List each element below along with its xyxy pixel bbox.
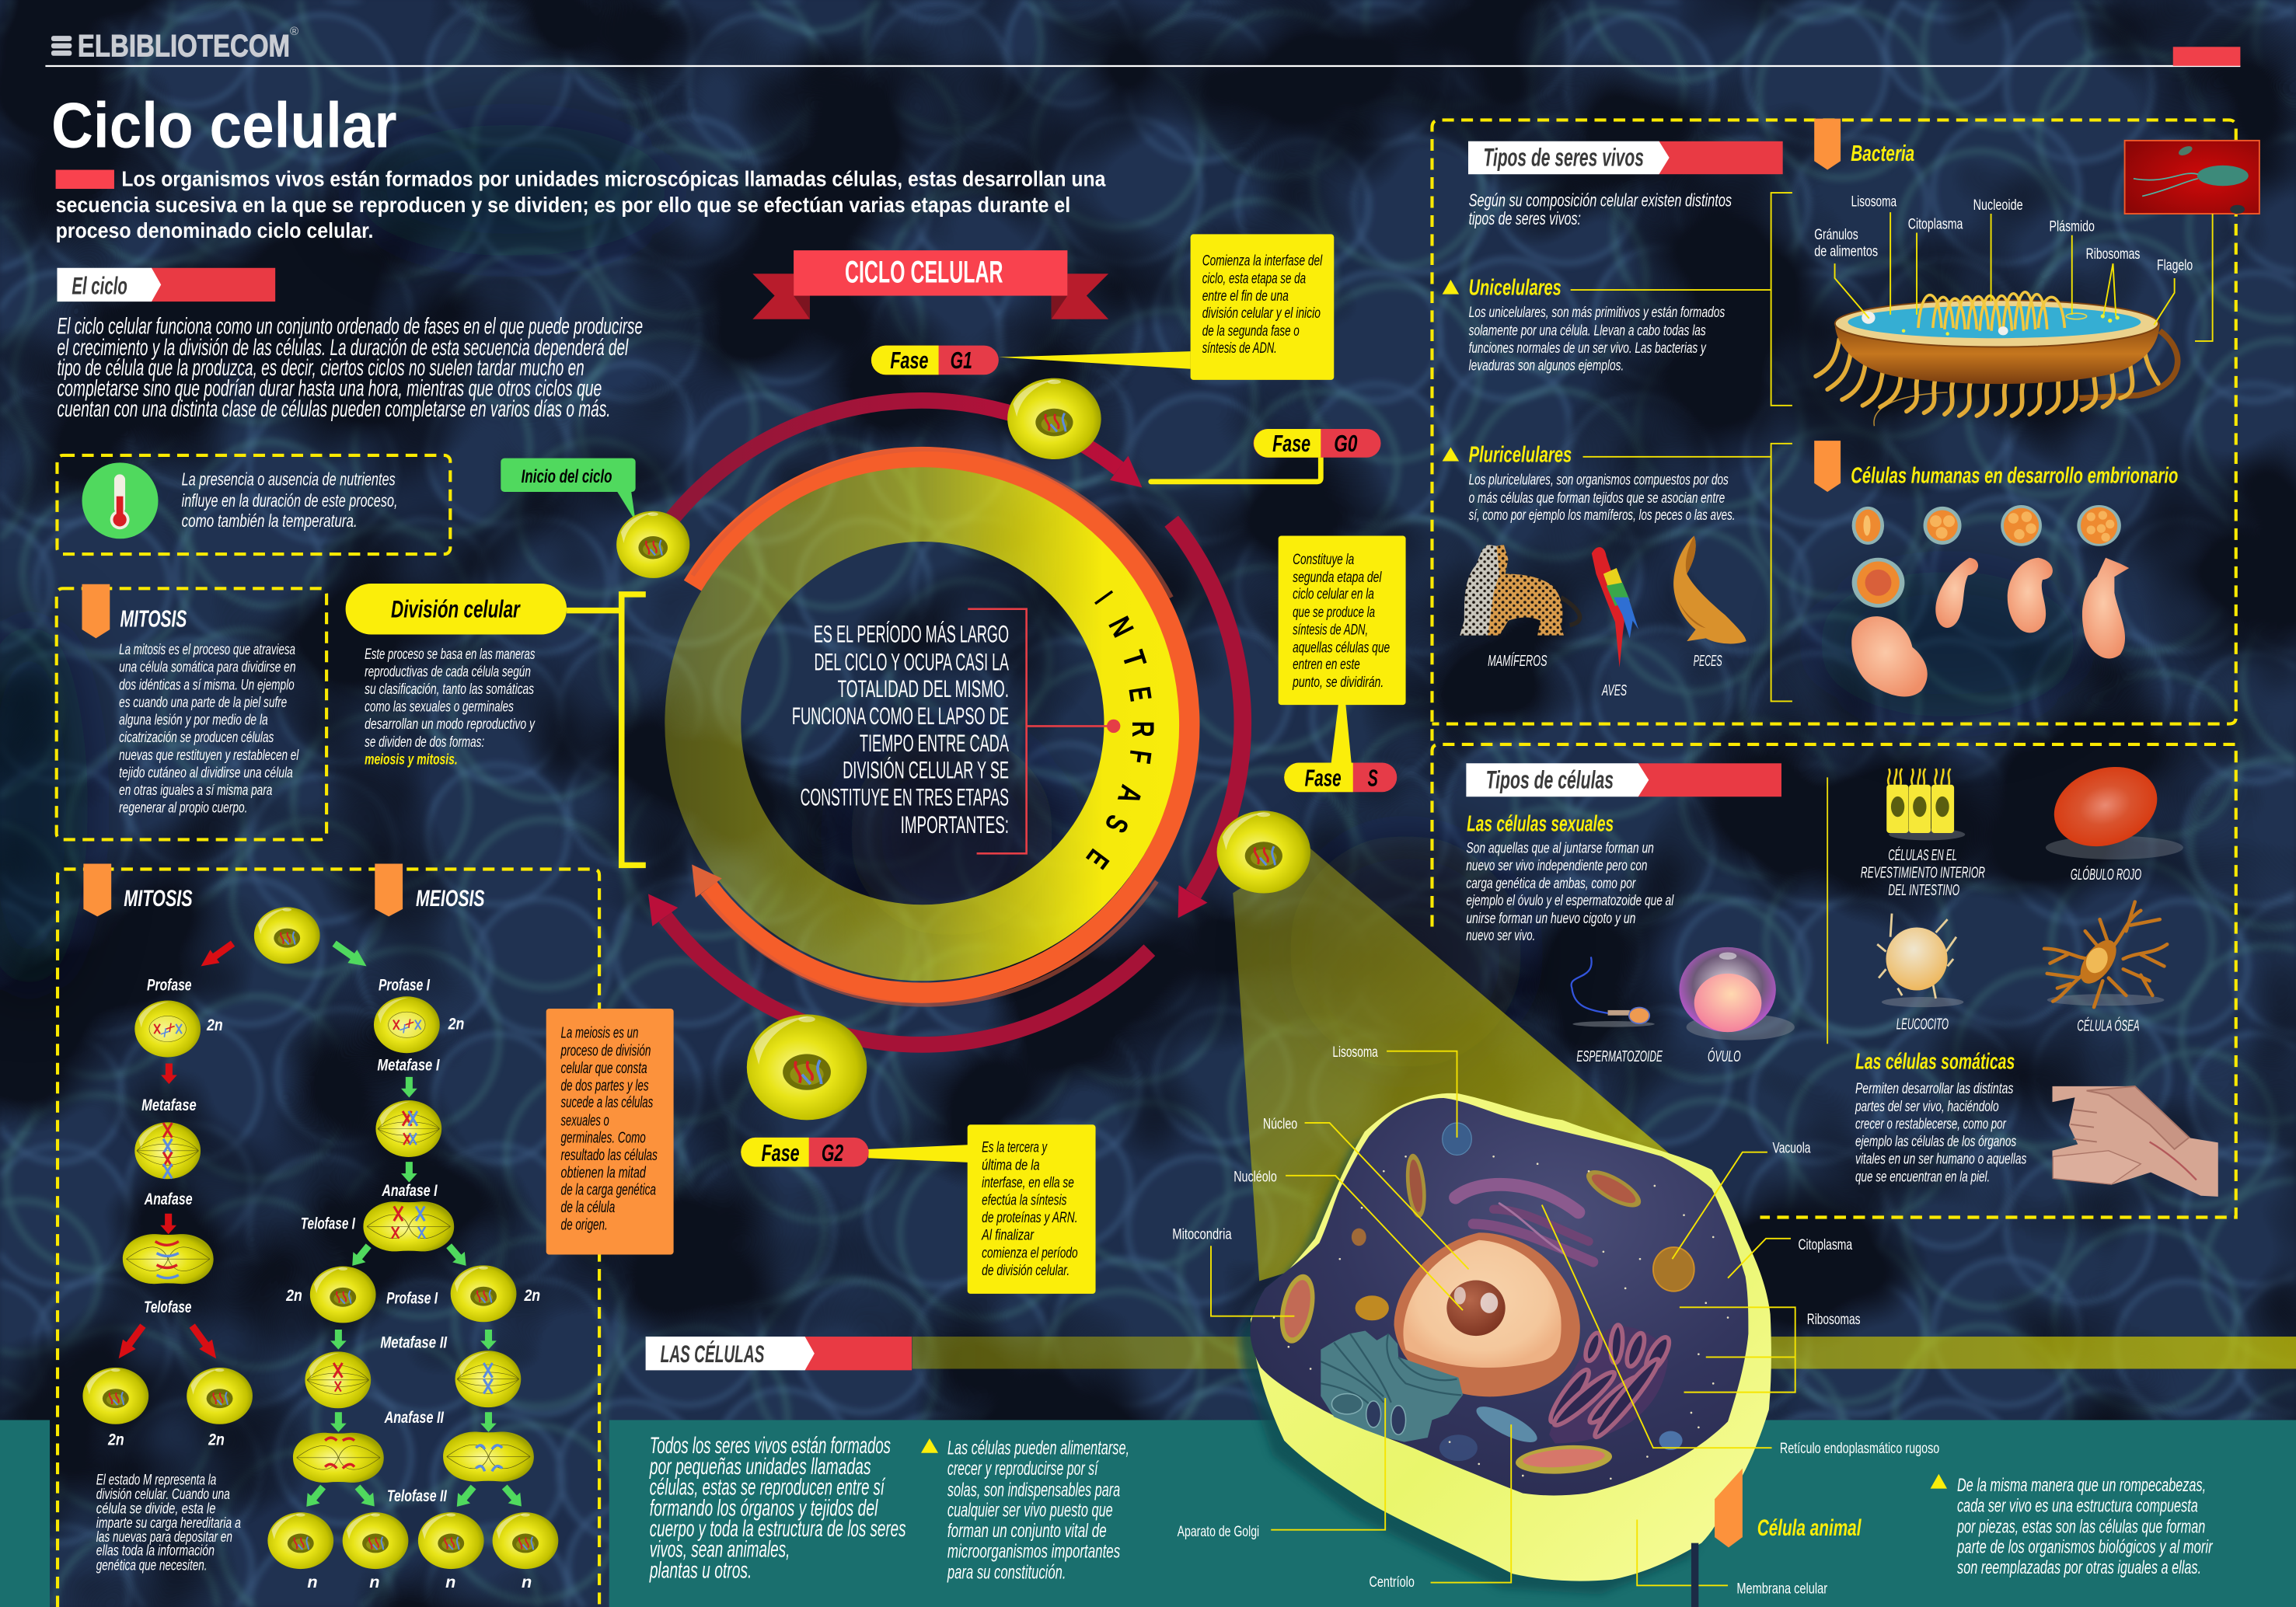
callout G2: Al finalizar <box>981 1227 1035 1244</box>
panel: tipos de seres vivos: Bacteria <box>1851 141 1914 166</box>
stage labels: Telofase II <box>387 1486 448 1505</box>
icon: leukocyte <box>1877 914 1963 1007</box>
sex cell labels: ESPERMATOZOIDE <box>1576 1048 1663 1065</box>
panel: temperature: influye en la duración de este proceso, <box>182 490 397 511</box>
cell: inicio <box>616 511 689 578</box>
callout: meiosis: sexuales o <box>561 1112 609 1130</box>
interphase center text: TOTALIDAD DEL MISMO. <box>838 675 1009 702</box>
header rule <box>45 65 2240 67</box>
text: las celulas pueden alimentarse: Las células pueden alimentarse, <box>947 1438 1129 1459</box>
stage labels: 2n <box>448 1013 464 1033</box>
mitosis cells <box>82 1001 253 1424</box>
heading tab: tipos de celulas <box>1466 763 1781 797</box>
text: estado M: ellas toda la información <box>96 1543 215 1560</box>
panel: mitosis and meiosis diagram <box>58 864 599 1607</box>
callout S: segunda etapa del <box>1293 569 1382 586</box>
heading tab: El ciclo <box>57 268 275 302</box>
callout: meiosis: de dos partes y les <box>561 1077 649 1095</box>
stage labels: Telofase <box>144 1297 191 1316</box>
block: sexual cells: Son aquellas que al juntarse forman un <box>1466 840 1654 857</box>
panel: mitosis definition: regenerar al propio cuerpo. <box>119 800 247 817</box>
cell labels: DEL INTESTINO <box>1888 881 1959 899</box>
block: somatic cells: que se encuentran en la piel. <box>1855 1168 1990 1185</box>
callout: meiosis: de origen. <box>561 1216 608 1234</box>
yellow band behind cell <box>912 1337 2296 1368</box>
ring label: INTERFASE: N <box>1101 612 1140 643</box>
photo: bacterium <box>2125 141 2259 214</box>
logo: ® <box>290 25 298 38</box>
bacterium labels: Plásmido <box>2050 218 2095 235</box>
ring label: INTERFASE: F <box>1122 748 1157 765</box>
phase G2 label <box>741 1138 968 1166</box>
unicelulares: funciones normales de un ser vivo. Las bacterias y <box>1469 340 1707 357</box>
icon: red blood cell <box>2043 755 2183 859</box>
block: sexual cells <box>1466 811 1674 944</box>
stage labels: Telofase I <box>301 1213 356 1232</box>
text: todos los seres vivos: plantas u otros. <box>649 1559 752 1584</box>
unicelulares: levaduras son algunos ejemplos. <box>1469 357 1624 375</box>
stage labels: n <box>307 1572 318 1591</box>
text: division celular: meiosis y mitosis. <box>365 751 458 768</box>
bacterium labels: Nucleoide <box>1973 197 2023 214</box>
interphase center text: FUNCIONA COMO EL LAPSO DE <box>792 702 1009 730</box>
phase G1 label <box>871 346 1191 375</box>
text: las celulas pueden alimentarse: microorganismos importantes <box>947 1541 1120 1563</box>
text: division celular: desarrollan un modo reproductivo y <box>365 716 536 733</box>
bacterium labels: Ribosomas <box>2086 246 2140 263</box>
panel: mitosis definition: dos idénticas a sí misma. Un ejemplo <box>119 676 295 693</box>
callout: meiosis: celular que consta <box>561 1059 647 1077</box>
orange tab meiosis <box>375 864 403 916</box>
ring label: INTERFASE: I <box>1088 586 1118 610</box>
labels: animal cell <box>1172 1044 1939 1598</box>
callout: meiosis: resultado las células <box>561 1146 658 1164</box>
tab: bacteria <box>1814 119 1841 170</box>
cell labels: LEUCOCITO <box>1896 1015 1949 1033</box>
brackets <box>1571 193 1792 701</box>
callout G2: de proteínas y ARN. <box>982 1209 1078 1226</box>
bracket: division <box>567 594 646 865</box>
panel: tipos de seres vivos <box>1432 119 2259 741</box>
ring label: INTERFASE: E <box>1122 685 1158 703</box>
callout S: aquellas células que <box>1293 639 1390 656</box>
unicelulares: Unicelulares <box>1469 274 1561 299</box>
callout G1: de la segunda fase o <box>1202 322 1300 340</box>
bracket: bacterium photo <box>2195 214 2213 341</box>
interphase center text: CONSTITUYE EN TRES ETAPAS <box>801 784 1009 811</box>
callout: meiosis: proceso de división <box>560 1041 651 1059</box>
stage labels: 2n <box>107 1429 124 1448</box>
stage labels: Metafase <box>141 1095 197 1114</box>
heading tab: las celulas: LAS CÉLULAS <box>661 1340 765 1368</box>
callout: meiosis: de la célula <box>561 1198 615 1216</box>
cell labels: GLÓBULO ROJO <box>2071 866 2141 884</box>
stage labels: Profase I <box>386 1288 438 1308</box>
panel: mitosis definition: La mitosis es el proceso que atraviesa <box>119 641 295 658</box>
text: estado M: división celular. Cuando una <box>96 1486 230 1503</box>
bacterium labels <box>1814 193 2193 274</box>
pill: division celular <box>346 584 567 635</box>
icon: sperm <box>1572 957 1655 1027</box>
organelle: ribosome speckles <box>1273 1156 1729 1480</box>
text: todos los seres vivos: células, estas se reproducen entre sí <box>650 1475 886 1500</box>
red bracket with dot <box>968 609 1120 853</box>
block: somatic cells: crecer o restablecerse, como por <box>1855 1116 2007 1133</box>
callout S: Constituye la <box>1293 551 1354 568</box>
block: sexual cells: unirse forman un huevo cigoto y un <box>1466 910 1635 927</box>
panel: tipos de celulas <box>1432 744 2236 1217</box>
intro text: proceso denominado ciclo celular. <box>56 218 373 242</box>
panel: mitosis definition: nuevas que restituyen y restablecen el <box>119 747 299 764</box>
unicelulares <box>1443 274 1725 375</box>
meiosis cells <box>267 996 558 1569</box>
labels: animal cell: Centríolo <box>1369 1574 1415 1591</box>
ring label: INTERFASE: A <box>1111 781 1149 808</box>
pill: division celular: División celular <box>391 595 521 622</box>
label: inicio del ciclo: Inicio del ciclo <box>522 466 612 487</box>
icon: fish <box>1673 536 1746 643</box>
labels: animal cell: Lisosoma <box>1332 1044 1378 1061</box>
icon: jaguar <box>1460 545 1580 636</box>
pluricelulares: sí, como por ejemplo los mamíferos, los peces o las aves. <box>1469 507 1735 524</box>
callout S: que se produce la <box>1293 604 1375 621</box>
bacterium labels: Flagelo <box>2157 257 2193 274</box>
illustration: embryo stages <box>1851 505 2129 696</box>
callout G2: Es la tercera y <box>982 1139 1048 1156</box>
callout: meiosis: germinales. Como <box>561 1128 646 1146</box>
labels: animal cell: Membrana celular <box>1736 1581 1827 1598</box>
text: las celulas pueden alimentarse: solas, son indispensables para <box>947 1479 1120 1501</box>
phase S label: Fase <box>1305 766 1342 792</box>
panel: mitosis and meiosis diagram: MITOSIS <box>124 887 193 912</box>
panel: mitosis definition: en otras iguales a sí misma para <box>119 782 272 799</box>
pluricelulares <box>1443 441 1735 524</box>
callout: meiosis: La meiosis es un <box>561 1024 638 1042</box>
ring label: INTERFASE <box>1080 586 1160 875</box>
text: estado M: célula se divide, esta le <box>96 1500 216 1517</box>
organelle: rough reticulum <box>1546 1324 1673 1444</box>
cell labels <box>1861 846 2141 1034</box>
panel: tipos de seres vivos: Células humanas en desarrollo embrionario <box>1851 463 2178 488</box>
callout G1: Comienza la interfase del <box>1202 253 1323 270</box>
logo: ELBIBLIOTECOM <box>78 30 290 64</box>
text: las celulas pueden alimentarse: crecer y reproducirse por sí <box>947 1458 1099 1480</box>
organelle: vesicles <box>1352 1123 1694 1461</box>
cycle ribbon title <box>752 250 1108 319</box>
animal labels: AVES <box>1601 681 1627 699</box>
interphase center text: IMPORTANTES: <box>901 811 1009 838</box>
callout: meiosis: de la carga genética <box>561 1180 656 1198</box>
text: division celular <box>365 646 536 768</box>
organelle: golgi upper (purple) <box>1456 1184 1593 1262</box>
label: celula animal: Célula animal <box>1757 1516 1862 1541</box>
callout G1: síntesis de ADN. <box>1202 340 1277 357</box>
stage labels: 2n <box>206 1015 223 1034</box>
text: estado M <box>96 1471 241 1574</box>
tab: celula animal <box>1715 1469 1743 1547</box>
text: El ciclo: cuentan con una distinta clase de células pueden completarse en varios días o más. <box>57 397 611 422</box>
orange tab mitosis <box>83 864 111 916</box>
panel: mitosis definition: tejido cutáneo al dividirse una célula <box>119 764 293 781</box>
interphase center text: TIEMPO ENTRE CADA <box>860 730 1009 757</box>
cell: G1 <box>1007 378 1101 459</box>
phase G0 label with connector: Fase <box>1272 431 1310 457</box>
block: somatic cells: partes del ser vivo, haciéndolo <box>1855 1098 1999 1115</box>
panel: mitosis and meiosis diagram: MEIOSIS <box>416 887 485 912</box>
orange tab <box>82 584 110 638</box>
illustration: bacterium <box>1816 292 2178 426</box>
phase G1 label: Fase <box>890 348 928 374</box>
stage labels: n <box>445 1572 455 1591</box>
unicelulares: solamente por una célula. Llevan a cabo todas las <box>1469 322 1706 339</box>
stage labels: Profase <box>147 975 192 995</box>
divider <box>1827 777 1828 1044</box>
stage labels: 2n <box>524 1285 540 1305</box>
block: sexual cells: nuevo ser vivo independiente pero con <box>1466 857 1647 874</box>
heading tab: tipos de seres vivos: Tipos de seres vivos <box>1483 144 1644 172</box>
text: division celular: se dividen de dos formas: <box>365 734 484 751</box>
cell labels: CÉLULA ÓSEA <box>2077 1016 2140 1034</box>
yellow inner ring <box>665 465 1180 981</box>
text: El ciclo: tipo de célula que la produzca, es decir, ciertos ciclos no suelen tardar mucho en <box>57 356 584 381</box>
phase G0 label with connector: G0 <box>1334 431 1358 457</box>
phase G2 label: G2 <box>822 1141 843 1166</box>
callout G2: última de la <box>982 1156 1040 1173</box>
stage labels: Metafase II <box>380 1333 448 1352</box>
stage labels <box>107 975 540 1591</box>
text: todos los seres vivos: cuerpo y toda la estructura de los seres <box>650 1517 906 1542</box>
heading tab: las celulas <box>646 1337 912 1370</box>
cycle ribbon title: CICLO CELULAR <box>845 256 1003 290</box>
panel: temperature: como también la temperatura. <box>182 511 358 531</box>
text: rompecabezas <box>1931 1474 2213 1578</box>
phase G1 label: G1 <box>951 348 972 374</box>
icon: ovum <box>1679 947 1795 1041</box>
callout G1 <box>1191 234 1334 380</box>
callout: meiosis: obtienen la mitad <box>561 1164 647 1182</box>
text: estado M: las nuevas para depositar en <box>96 1529 232 1546</box>
panel: mitosis definition: es cuando una parte de la piel sufre <box>119 694 287 711</box>
panel: mitosis definition: cicatrización se producen células <box>119 729 274 746</box>
animal labels: MAMÍFEROS <box>1488 652 1548 670</box>
text: division celular: como las sexuales o germinales <box>365 699 514 716</box>
callout G2: comienza el período <box>982 1244 1078 1261</box>
text: division celular: su clasificación, tanto las somáticas <box>365 681 534 698</box>
callout S: ciclo celular en la <box>1293 586 1374 603</box>
stage labels: 2n <box>208 1429 225 1448</box>
ring label: INTERFASE: S <box>1098 810 1135 838</box>
pluricelulares: Los pluricelulares, son organismos compuestos por dos <box>1469 472 1729 489</box>
interphase center text: ES EL PERÍODO MÁS LARGO <box>814 620 1009 647</box>
interphase center text: DIVISIÓN CELULAR Y SE <box>843 757 1009 784</box>
text: todos los seres vivos <box>649 1434 906 1584</box>
text: El ciclo: el crecimiento y la división de las células. La duración de esta secuencia dependerá del <box>57 336 629 361</box>
tab: embryo <box>1814 441 1841 492</box>
labels: animal cell: Mitocondria <box>1172 1226 1232 1243</box>
panel: mitosis definition <box>57 584 326 839</box>
text: las celulas pueden alimentarse: cualquier ser vivo puesto que <box>947 1500 1113 1522</box>
animal labels <box>1488 652 1722 699</box>
block: sexual cells: Las células sexuales <box>1467 811 1614 836</box>
text: estado M: imparte su carga hereditaria a <box>96 1515 241 1532</box>
intro text: secuencia sucesiva en la que se reproducen y se dividen; es por ello que se efectúan varias etapas durante el <box>56 193 1070 217</box>
block: somatic cells: vitales en un ser humano o aquellas <box>1855 1151 2026 1168</box>
callout G1: entre el fin de una <box>1202 288 1289 305</box>
panel: temperature <box>57 455 450 554</box>
callout S: punto, se dividirán. <box>1292 674 1384 691</box>
callout G2: efectúa la síntesis <box>982 1191 1067 1208</box>
heading tab: tipos de celulas: Tipos de células <box>1486 765 1614 793</box>
callout G2 <box>968 1124 1096 1294</box>
panel: mitosis definition: MITOSIS <box>120 606 187 632</box>
organelle: mitochondria <box>1274 1152 1646 1476</box>
callout S <box>1279 536 1406 764</box>
unicelulares: Los unicelulares, son más primitivos y están formados <box>1469 304 1725 321</box>
orange arrow ring <box>692 449 1189 1005</box>
zoom cone from cell S to animal cell <box>1233 846 1670 1281</box>
illustration: animal cell <box>1239 1093 1771 1595</box>
panel: temperature: La presencia o ausencia de nutrientes <box>182 469 396 490</box>
text: El ciclo: completarse sino que podrían durar hasta una hora, mientras que otros ciclos que <box>57 377 602 402</box>
panel: mitosis definition: alguna lesión y por medio de la <box>119 712 268 729</box>
text: todos los seres vivos: por pequeñas unidades llamadas <box>649 1455 871 1480</box>
callout: meiosis <box>546 1009 674 1255</box>
text: El ciclo: El ciclo celular funciona como un conjunto ordenado de fases en el que puede producirse <box>57 315 643 340</box>
callout G2: de división celular. <box>982 1262 1069 1279</box>
callout G1: división celular y el inicio <box>1202 305 1321 322</box>
stage labels: Anafase <box>144 1189 193 1208</box>
icon: intestinal cells <box>1886 769 1965 840</box>
callout S: síntesis de ADN, <box>1293 621 1368 638</box>
cell labels: CÉLULAS EN EL <box>1888 846 1957 864</box>
phase G0 label with connector <box>1151 429 1381 482</box>
leader lines: animal cell <box>1211 1051 1795 1585</box>
block: sexual cells: carga genética de ambas, como por <box>1466 875 1636 892</box>
stage labels: Metafase I <box>377 1055 440 1075</box>
sex cell labels: ÓVULO <box>1708 1048 1741 1065</box>
panel: mitosis definition: una célula somática para dividirse en <box>119 659 296 676</box>
intro text: Los organismos vivos están formados por unidades microscópicas llamadas células, estas desarrollan una <box>121 166 1106 190</box>
heading tab: tipos de seres vivos <box>1468 141 1783 174</box>
stage labels: Profase I <box>379 975 431 995</box>
crimson cycle arrows <box>648 400 1243 1044</box>
phase S label: S <box>1368 766 1378 792</box>
bacterium labels: Citoplasma <box>1908 216 1963 233</box>
labels: animal cell: Núcleo <box>1263 1116 1297 1133</box>
header red tag <box>2173 47 2240 66</box>
block: somatic cells: Las células somáticas <box>1855 1048 2015 1073</box>
text: todos los seres vivos: Todos los seres vivos están formados <box>650 1434 891 1459</box>
block: somatic cells: ejemplo las células de los órganos <box>1855 1133 2016 1150</box>
panel: tipos de seres vivos: tipos de seres vivos: <box>1469 208 1581 228</box>
bacterium labels: de alimentos <box>1814 243 1878 260</box>
ring label: INTERFASE: E <box>1080 843 1115 875</box>
interphase center text: DEL CICLO Y OCUPA CASI LA <box>814 648 1009 675</box>
labels: animal cell: Retículo endoplasmático rugoso <box>1780 1440 1939 1457</box>
text: division celular: Este proceso se basa en las maneras <box>365 646 535 663</box>
teal bottom band <box>0 1420 2296 1607</box>
callout G1: ciclo, esta etapa se da <box>1202 270 1306 287</box>
text: las celulas pueden alimentarse: forman un conjunto vital de <box>947 1520 1107 1542</box>
text: todos los seres vivos: formando los órganos y tejidos del <box>650 1496 878 1521</box>
title: Ciclo celular <box>51 89 397 161</box>
label: inicio del ciclo <box>501 458 636 521</box>
text: estado M: El estado M representa la <box>96 1471 216 1488</box>
labels: animal cell: Citoplasma <box>1798 1236 1852 1253</box>
callout S: entren en este <box>1293 656 1360 673</box>
organelle: nucleus <box>1394 1232 1580 1396</box>
stage labels: Anafase I <box>382 1180 438 1200</box>
intro text <box>56 166 1106 242</box>
panel: tipos de seres vivos: Según su composición celular existen distintos <box>1469 190 1732 211</box>
text: las celulas pueden alimentarse <box>921 1438 1129 1583</box>
phase S label <box>1284 763 1397 792</box>
pluricelulares: Pluricelulares <box>1469 441 1572 466</box>
callout G2: interfase, en ella se <box>982 1174 1074 1191</box>
bacterium labels: Lisosoma <box>1851 193 1896 211</box>
labels: animal cell: Vacuola <box>1772 1140 1810 1157</box>
block: sexual cells: ejemplo el óvulo y el espermatozoide que al <box>1466 892 1674 909</box>
bacterium leaders <box>1835 212 2175 325</box>
interphase center text <box>792 620 1009 838</box>
block: sexual cells: nuevo ser vivo. <box>1466 927 1535 944</box>
stage labels: n <box>522 1572 532 1591</box>
labels: animal cell: Aparato de Golgi <box>1178 1523 1259 1540</box>
pluricelulares: o más células que forman tejidos que se asocian entre <box>1469 490 1725 507</box>
cell: S <box>1217 810 1310 894</box>
callout: meiosis: sucede a las células <box>561 1093 653 1111</box>
phase G2 label: Fase <box>762 1141 800 1166</box>
stage labels: Anafase II <box>384 1407 445 1427</box>
block: somatic cells <box>1855 1048 2026 1185</box>
text: todos los seres vivos: vivos, sean animales, <box>650 1538 790 1563</box>
bacterium labels: Gránulos <box>1814 226 1858 243</box>
icon: bone cell <box>2044 902 2167 1007</box>
icon: parrot <box>1592 547 1638 668</box>
stage labels: n <box>369 1572 380 1591</box>
labels: animal cell: Ribosomas <box>1807 1311 1861 1328</box>
organelle: golgi apparatus (teal) <box>1321 1330 1463 1442</box>
cell labels: REVESTIMIENTO INTERIOR <box>1861 864 1985 882</box>
ring label: INTERFASE: T <box>1115 647 1153 671</box>
labels: animal cell: Nucléolo <box>1233 1168 1277 1185</box>
animal labels: PECES <box>1694 652 1722 670</box>
stage labels: 2n <box>285 1285 302 1305</box>
icon: thermometer <box>82 462 158 539</box>
text: estado M: genética que necesiten. <box>96 1556 208 1574</box>
heading tab: El ciclo: El ciclo <box>72 273 127 300</box>
text: El ciclo <box>57 315 643 422</box>
cell: G2 <box>747 1014 867 1120</box>
dark post under tab <box>1691 1543 1698 1607</box>
text: las celulas pueden alimentarse: para su constitución. <box>947 1561 1066 1583</box>
photo: hands <box>2053 1086 2218 1197</box>
ring label: INTERFASE: R <box>1125 721 1160 737</box>
block: somatic cells: Permiten desarrollar las distintas <box>1855 1080 2013 1097</box>
text: division celular: reproductivas de cada célula según <box>365 663 531 680</box>
